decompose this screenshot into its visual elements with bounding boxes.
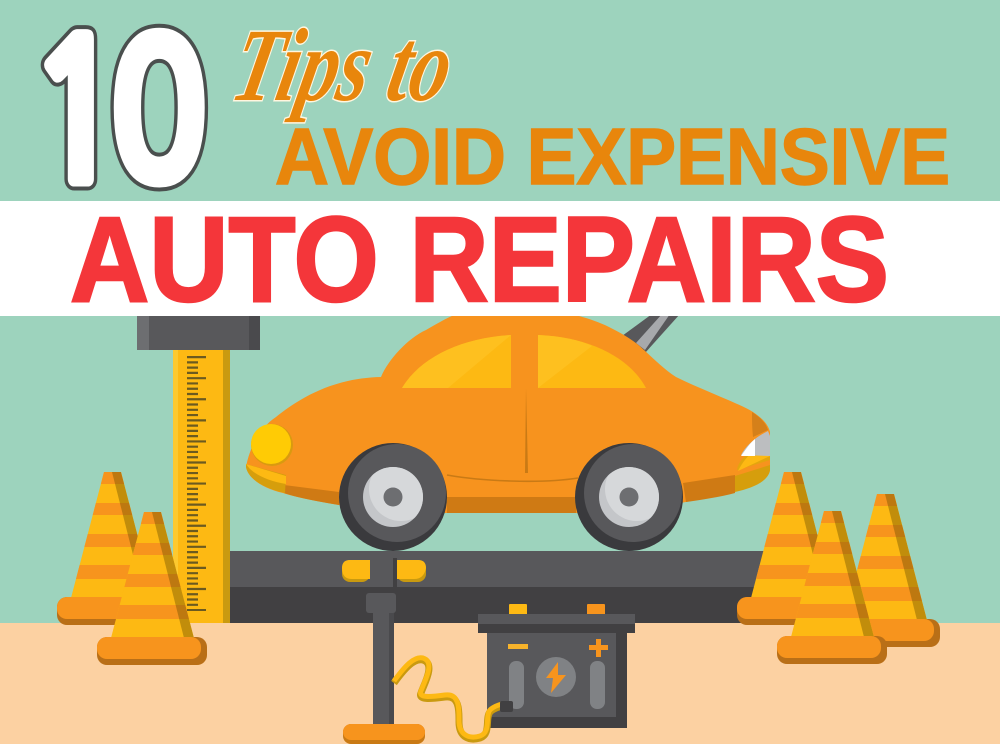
lift top cap bbox=[137, 316, 260, 350]
car body bbox=[246, 312, 770, 513]
rear wheel bbox=[575, 443, 683, 551]
traffic cone: right front bbox=[777, 511, 887, 664]
title: AVOID EXPENSIVE: AVOID EXPENSIVE bbox=[275, 112, 950, 201]
traffic cone: left back bbox=[57, 472, 167, 625]
white title band bbox=[0, 201, 1000, 316]
car bbox=[246, 312, 770, 551]
measuring ruler post bbox=[173, 350, 230, 623]
icon: wrench behind car bbox=[622, 314, 680, 353]
window: rear bbox=[538, 335, 646, 388]
rear bumper bbox=[735, 465, 770, 492]
ground bbox=[0, 623, 1000, 744]
traffic cone: right back bbox=[737, 472, 847, 625]
lower sill bbox=[284, 475, 735, 513]
battery bbox=[478, 604, 635, 728]
window: front bbox=[402, 335, 511, 388]
front bumper bbox=[246, 464, 286, 493]
traffic cone: left front bbox=[97, 512, 207, 665]
lift jack bbox=[342, 558, 426, 744]
battery cable bbox=[394, 658, 513, 739]
door lines bbox=[447, 388, 578, 481]
title: Tips to: Tips to bbox=[223, 7, 464, 123]
title: 10: 10 bbox=[27, 18, 209, 210]
front wheel bbox=[339, 443, 447, 551]
rear light bbox=[741, 431, 770, 456]
traffic cone: far right bbox=[830, 494, 940, 647]
title: AUTO REPAIRS: AUTO REPAIRS bbox=[70, 191, 889, 327]
title: 10: 10 bbox=[27, 18, 209, 210]
headlight bbox=[251, 424, 293, 466]
lift platform bbox=[230, 551, 770, 623]
